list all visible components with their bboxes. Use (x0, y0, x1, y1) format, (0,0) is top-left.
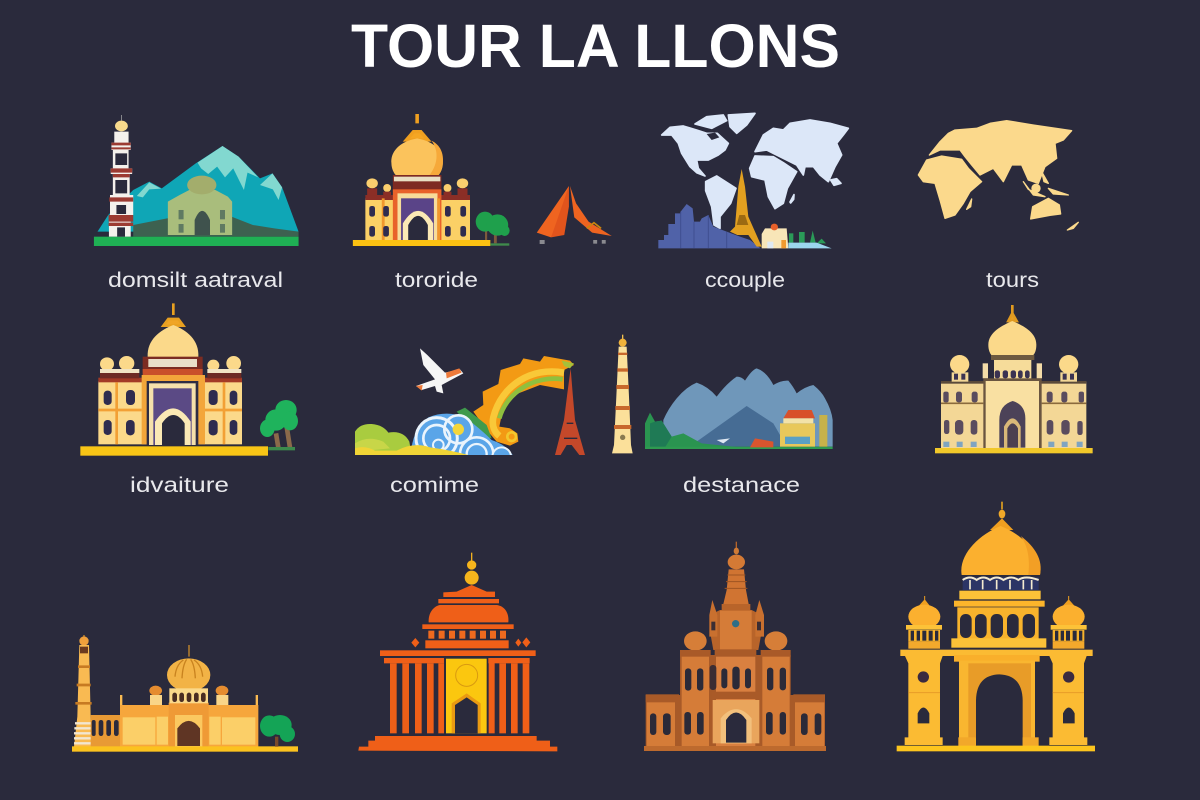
label: ccouple (705, 269, 785, 292)
panel: tororide (353, 114, 612, 292)
label: tours (986, 269, 1039, 292)
panel: domsilt aatraval (94, 115, 299, 292)
icon: world map with skyline (658, 113, 848, 248)
panel: golden gateway (897, 502, 1095, 751)
panel: ornate cream palace (935, 305, 1093, 453)
panel: comime (355, 348, 574, 497)
icon: domed palace with tree (353, 114, 510, 246)
icon: mosque (72, 635, 298, 752)
icon: domed palace with trees (80, 303, 298, 456)
left small dome (906, 596, 942, 649)
icon: golden domed gateway (897, 502, 1095, 751)
icon: gold world map (918, 121, 1078, 230)
panel: red tower and minaret (555, 335, 633, 455)
title: TOUR LA LLONS (351, 12, 840, 80)
icon: rainbow wave over clouds (355, 356, 574, 455)
label: comime (390, 474, 479, 497)
label: destanace (683, 474, 800, 497)
icon: tent (537, 186, 612, 244)
panel: tours (918, 121, 1078, 292)
icon: minaret with mountains and palace (94, 115, 299, 246)
icon: orange temple with columns (358, 553, 557, 751)
label: domsilt aatraval (108, 269, 283, 292)
label: idvaiture (130, 474, 229, 497)
panel: mosque with minaret (72, 635, 298, 752)
right small dome (1051, 596, 1087, 649)
icon: red lattice tower (555, 361, 585, 455)
panel: copper palace (644, 542, 826, 751)
icon: copper palace (644, 542, 826, 751)
label: tororide (395, 269, 478, 292)
panel: destanace (645, 368, 833, 497)
panel: idvaiture (80, 303, 298, 497)
panel: ccouple (658, 113, 848, 292)
panel: orange temple (358, 553, 557, 751)
icon: cream minaret (612, 335, 633, 453)
icon: cream palace (935, 305, 1093, 453)
icon: mountains with village (645, 368, 833, 449)
icon: plane (416, 348, 463, 393)
